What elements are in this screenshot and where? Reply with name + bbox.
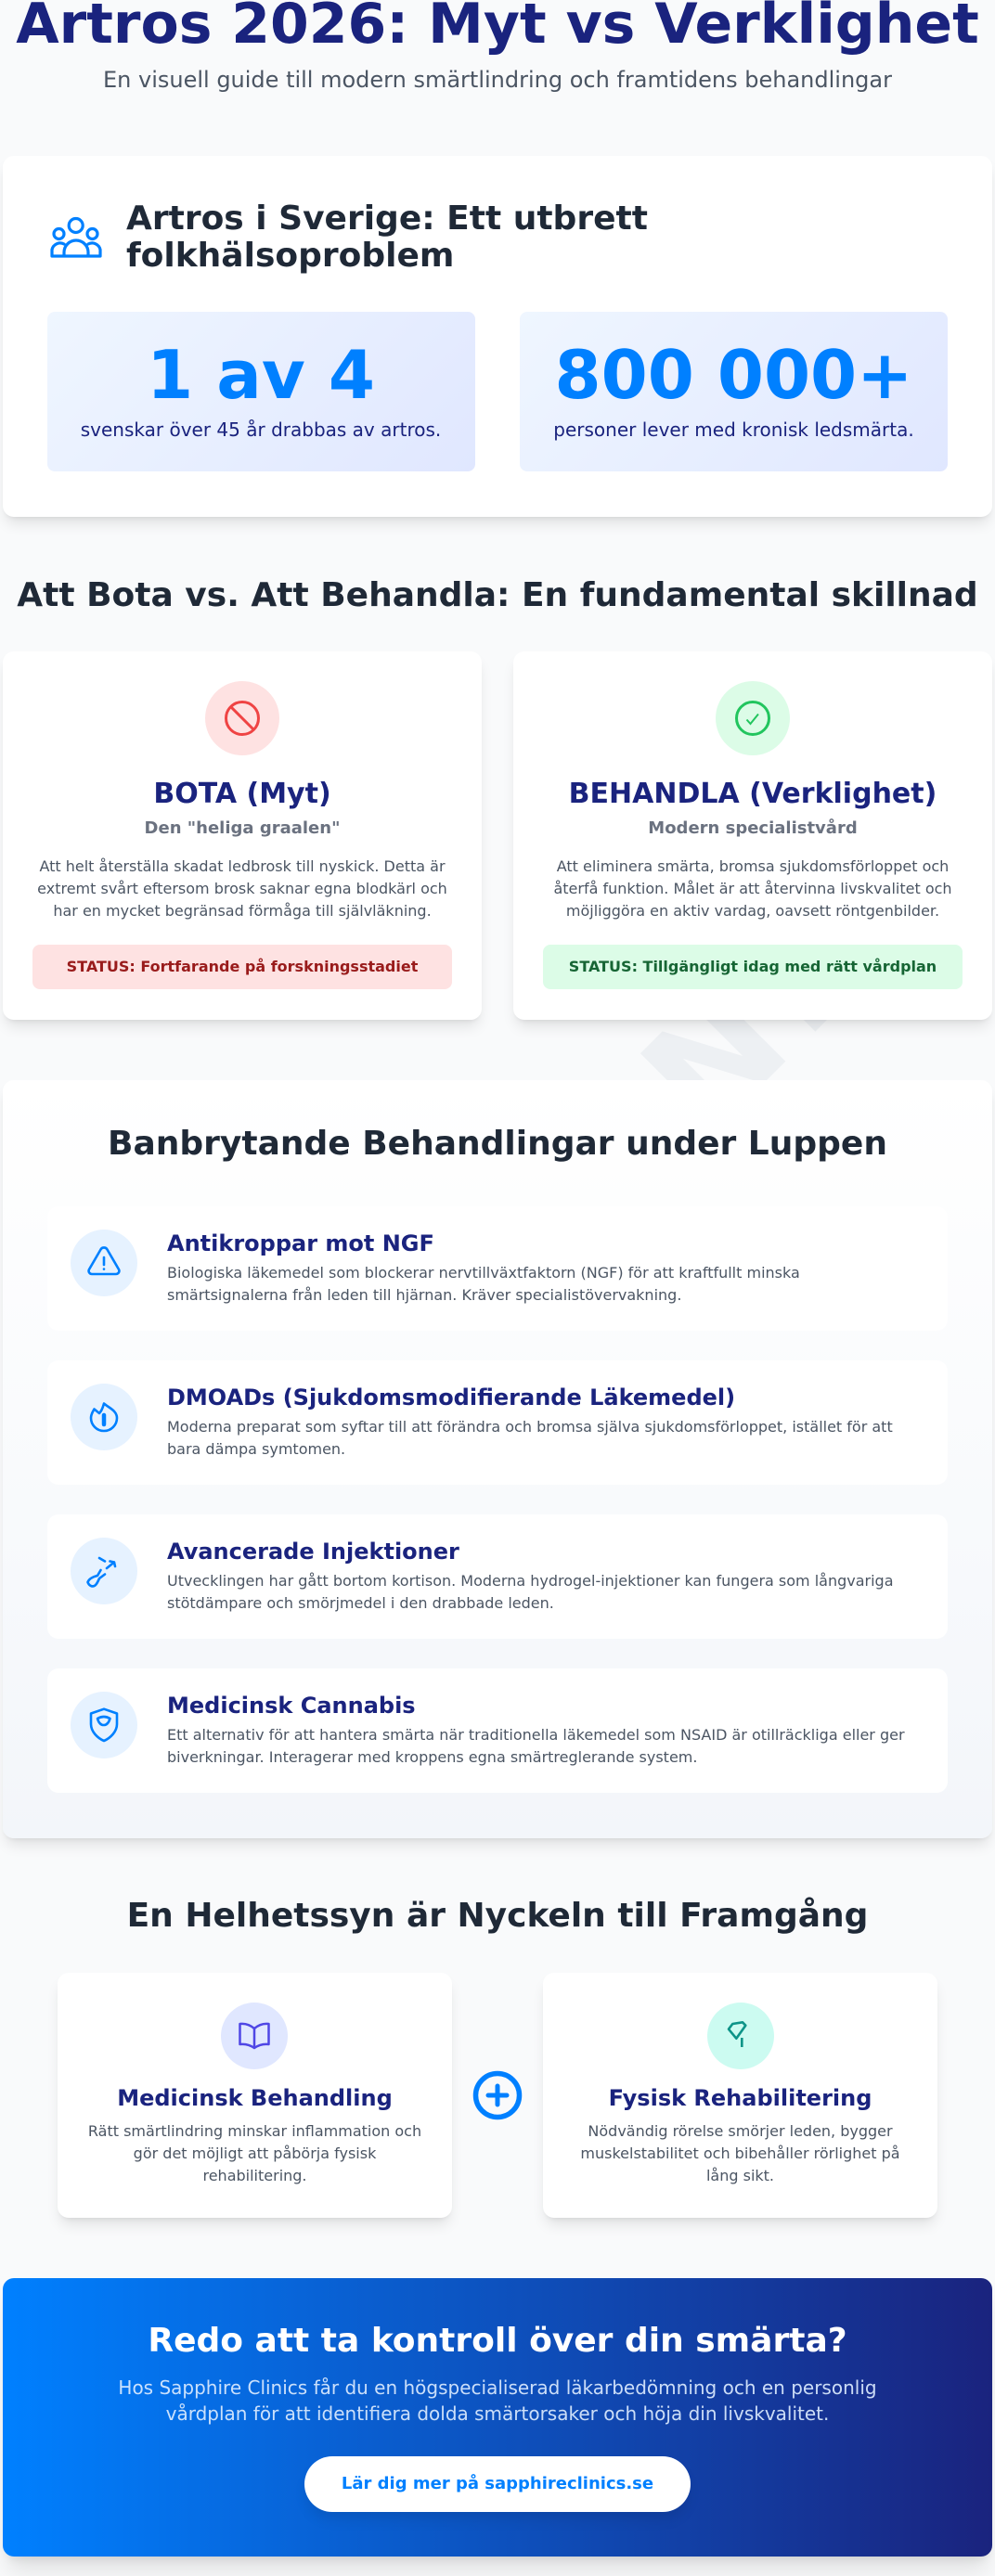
icon: rehab xyxy=(707,2003,774,2069)
title: Medicinsk Cannabis xyxy=(167,1693,416,1719)
subtitle: En visuell guide till modern smärtlindring och framtidens behandlingar xyxy=(103,67,892,93)
description: biverkningar. Interagerar med kroppens egna smärtreglerande system. xyxy=(167,1748,697,1766)
stat: 1 av 4 xyxy=(47,312,475,471)
status: research: STATUS: Fortfarande på forskningsstadiet xyxy=(67,958,418,975)
title: Fysisk Rehabilitering xyxy=(609,2085,872,2111)
stat caption: svenskar över 45 år drabbas av artros. xyxy=(81,419,441,441)
status: available: STATUS: Tillgängligt idag med rätt vårdplan xyxy=(569,958,937,975)
stat value: 800 000+ xyxy=(555,336,912,414)
stat value: 1 av 4 xyxy=(147,336,375,414)
treatment: Antikroppar xyxy=(71,1230,800,1304)
card body: har en mycket begränsad förmåga till självläkning. xyxy=(53,902,432,920)
panel: Fysisk Rehabilitering xyxy=(543,1973,937,2218)
treatment: Cannabis xyxy=(47,1668,948,1793)
description: Biologiska läkemedel som blockerar nervtillväxtfaktorn (NGF) för att kraftfullt minska xyxy=(167,1264,800,1282)
body xyxy=(88,2122,421,2184)
description: stötdämpare och smörjmedel i den drabbade leden. xyxy=(167,1594,554,1612)
description: Ett alternativ för att hantera smärta när traditionella läkemedel som NSAID är otillräckliga eller ger xyxy=(167,1726,905,1744)
body: muskelstabilitet och bibehåller rörlighet på xyxy=(580,2145,900,2162)
heading: Banbrytande: Banbrytande Behandlingar under Luppen xyxy=(108,1125,887,1163)
icon: shield xyxy=(71,1692,137,1758)
description: Moderna preparat som syftar till att förändra och bromsa själva sjukdomsförloppet, istället för att xyxy=(167,1418,893,1436)
icon: ban xyxy=(205,681,279,755)
panel: BOTA xyxy=(3,651,482,1020)
panel: BEHANDLA xyxy=(513,651,992,1020)
CTA text xyxy=(118,2376,877,2425)
watermark letters: NI xyxy=(610,905,870,1165)
description: smärtsignalerna från leden till hjärnan. Kräver specialistövervakning. xyxy=(167,1286,681,1304)
card body: Att eliminera smärta, bromsa sjukdomsförloppet och xyxy=(557,857,949,875)
icon: plus xyxy=(473,2071,522,2119)
card title: BOTA (Myt) xyxy=(153,778,331,810)
panel: call to action xyxy=(3,2278,992,2557)
heading: Helhetssyn: En Helhetssyn är Nyckeln till Framgång xyxy=(127,1897,868,1935)
icon: book xyxy=(221,2003,288,2069)
panel: Medicinsk Behandling xyxy=(58,1973,452,2218)
CTA heading: Redo att ta kontroll över din smärta? xyxy=(148,2322,847,2360)
stat caption: personer lever med kronisk ledsmärta. xyxy=(553,419,914,441)
stat: 800 000+ xyxy=(520,312,948,471)
body: lång sikt. xyxy=(706,2167,774,2184)
panel: Artros i Sverige xyxy=(3,156,992,517)
card body: återfå funktion. Målet är att återvinna livskvalitet och xyxy=(553,880,952,897)
card body xyxy=(37,857,447,920)
card body: möjliggöra en aktiv vardag, oavsett röntgenbilder. xyxy=(566,902,939,920)
description: Utvecklingen har gått bortom kortison. Moderna hydrogel-injektioner kan fungera som långvariga xyxy=(167,1572,894,1590)
description xyxy=(167,1264,800,1304)
treatment: DMOADs xyxy=(71,1384,893,1458)
body: Nödvändig rörelse smörjer leden, bygger xyxy=(588,2122,893,2140)
card title: BEHANDLA (Verklighet) xyxy=(569,778,937,810)
icon: flame xyxy=(71,1384,137,1450)
icon: check xyxy=(716,681,790,755)
heading: Att Bota vs. Att Behandla: Att Bota vs. Att Behandla: En fundamental skillnad xyxy=(17,576,978,614)
status: available xyxy=(543,945,963,989)
title: Antikroppar mot NGF xyxy=(167,1230,434,1256)
icon: alert triangle xyxy=(71,1230,137,1296)
card body: extremt svårt eftersom brosk saknar egna blodkärl och xyxy=(37,880,447,897)
CTA text: vårdplan för att identifiera dolda smärtorsaker och höja din livskvalitet. xyxy=(166,2402,829,2425)
title: Avancerade Injektioner xyxy=(167,1539,459,1565)
body: Rätt smärtlindring minskar inflammation och xyxy=(88,2122,421,2140)
card subtitle: Modern specialistvård xyxy=(648,818,858,838)
description xyxy=(167,1418,893,1458)
description xyxy=(167,1572,894,1612)
body: gör det möjligt att påbörja fysisk xyxy=(134,2145,376,2162)
CTA button xyxy=(304,2456,691,2512)
title: DMOADs (Sjukdomsmodifierande Läkemedel) xyxy=(167,1385,735,1410)
card body: Att helt återställa skadat ledbrosk till nyskick. Detta är xyxy=(39,857,446,875)
heading: Artros i Sverige xyxy=(126,200,648,275)
body xyxy=(580,2122,900,2184)
status: research xyxy=(32,945,452,989)
icon: people group xyxy=(50,217,102,258)
description xyxy=(167,1726,905,1766)
description: bara dämpa symtomen. xyxy=(167,1440,345,1458)
panel: treatments xyxy=(3,1080,992,1838)
heading: Artros i Sverige: Artros i Sverige: Ett utbrett xyxy=(126,200,648,238)
card body xyxy=(553,857,952,920)
body: rehabilitering. xyxy=(202,2167,307,2184)
treatment: Injektioner xyxy=(47,1538,948,1639)
CTA text: Hos Sapphire Clinics får du en högspecialiserad läkarbedömning och en personlig xyxy=(118,2376,877,2399)
card subtitle: Den "heliga graalen" xyxy=(145,818,340,838)
CTA button: Lär dig mer på sapphireclinics.se xyxy=(342,2474,653,2493)
heading: Artros i Sverige: folkhälsoproblem xyxy=(126,237,454,275)
icon: syringe xyxy=(71,1538,137,1604)
title: Medicinsk Behandling xyxy=(117,2085,393,2111)
